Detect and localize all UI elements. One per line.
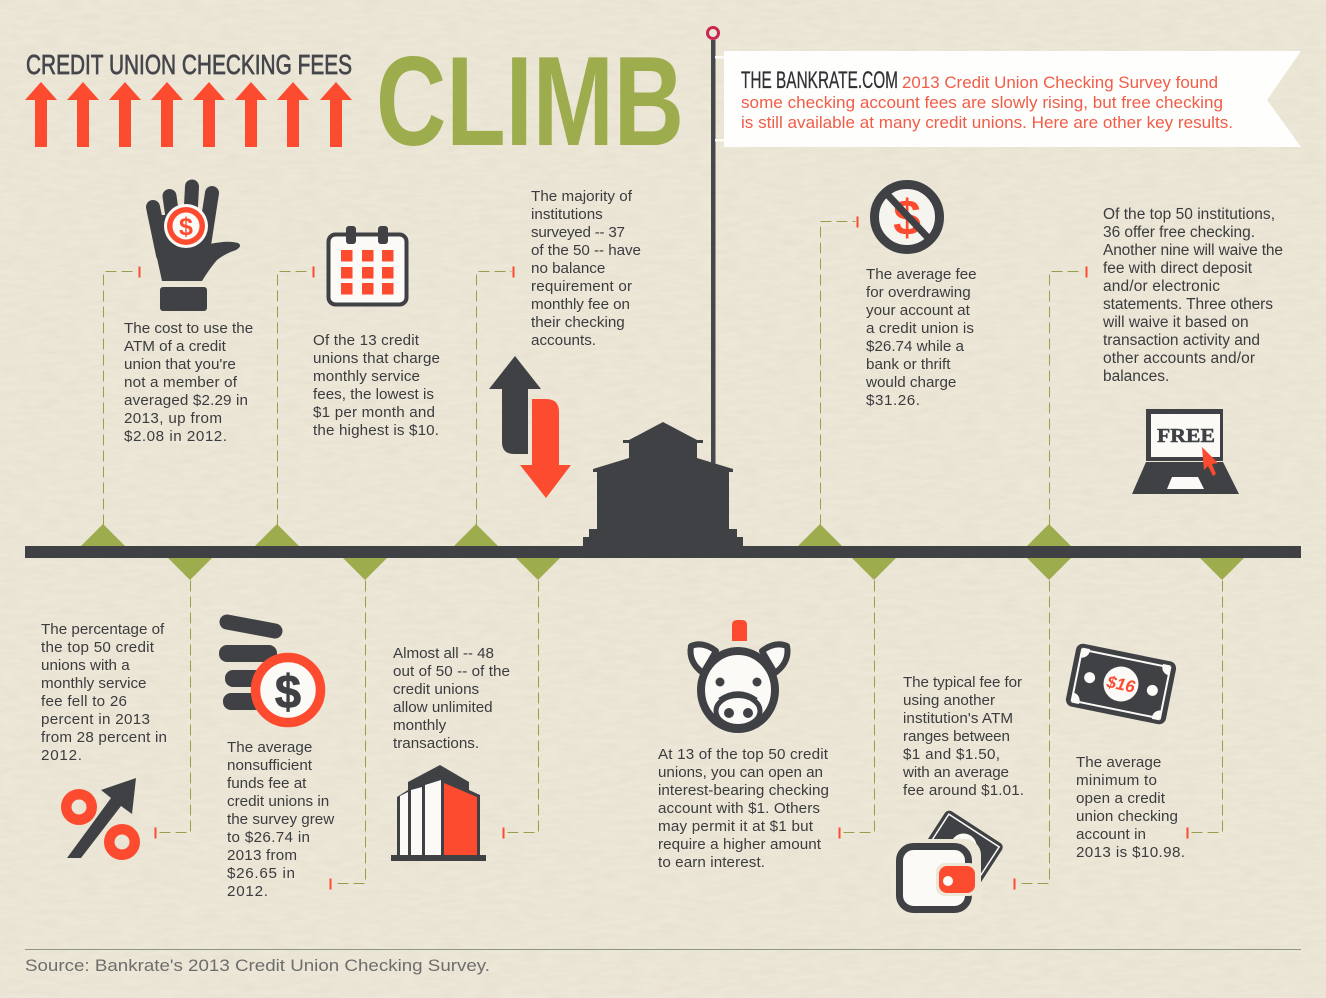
text: ATM cost: ATM of a credit — [124, 338, 227, 355]
text: monthly service fees: fees, the lowest is — [313, 386, 434, 403]
text: unlimited transactions: out of 50 -- of the — [393, 663, 510, 680]
icon: up and down arrows — [489, 356, 571, 498]
text: no balance requirement: of the 50 -- have — [531, 242, 641, 259]
text: ATM cost: averaged $2.29 in — [124, 392, 248, 409]
icon: coins with dollar: $ — [275, 665, 301, 718]
text: interest-bearing checking: At 13 of the top 50 credit — [658, 746, 829, 763]
text: overdraft fee: $31.26. — [866, 392, 920, 409]
text: interest-bearing checking: may permit it at $1 but — [658, 818, 814, 835]
text: percentage with monthly fee: The percentage of — [41, 621, 165, 638]
text: nonsufficient funds fee: 2013 from — [227, 847, 297, 864]
text: percentage with monthly fee: the top 50 credit — [41, 639, 155, 656]
text: overdraft fee: for overdrawing — [866, 284, 971, 301]
text: free checking: statements. Three others — [1103, 296, 1273, 313]
text: monthly service fees: $1 per month and — [313, 404, 435, 421]
source rule — [25, 949, 1301, 950]
text: ATM cost: 2013, up from — [124, 410, 222, 427]
text: ATM cost: The cost to use the — [124, 320, 253, 337]
text: no balance requirement: accounts. — [531, 332, 596, 349]
text: monthly service fees: the highest is $10. — [313, 422, 439, 439]
text: minimum to open: The average — [1076, 754, 1161, 771]
text: percentage with monthly fee: from 28 percent in — [41, 729, 167, 746]
text: unlimited transactions: Almost all -- 48 — [393, 645, 494, 662]
text: nonsufficient funds fee: nonsufficient — [227, 757, 313, 774]
text: unlimited transactions: transactions. — [393, 735, 479, 752]
text: percentage with monthly fee: unions with a — [41, 657, 130, 674]
text: ATM cost: not a member of — [124, 374, 238, 391]
text: percentage with monthly fee: percent in 2013 — [41, 711, 150, 728]
icon: hand with coin — [147, 186, 240, 311]
icon: hand with coin: $ — [179, 213, 193, 241]
title: credit union checking fees: CREDIT UNION CHECKING FEES — [26, 49, 352, 80]
text: interest-bearing checking: account with $1. Others — [658, 800, 820, 817]
text: no balance requirement: surveyed -- 37 — [531, 224, 625, 241]
text: no balance requirement: no balance — [531, 260, 605, 277]
text: no balance requirement: requirement or — [531, 278, 632, 295]
icon: sixteen dollar bill: $16 — [1104, 672, 1137, 697]
flagpole — [708, 28, 725, 470]
text: free checking: and/or electronic — [1103, 278, 1220, 295]
icon: coins with dollar — [219, 622, 320, 722]
text: interest-bearing checking: to earn interest. — [658, 854, 765, 871]
text: interest-bearing checking: require a higher amount — [658, 836, 822, 853]
text: nonsufficient funds fee: credit unions in — [227, 793, 329, 810]
text: percentage with monthly fee: monthly service — [41, 675, 147, 692]
text: no balance requirement: monthly fee on — [531, 296, 630, 313]
icon: laptop free: FREE — [1157, 425, 1215, 447]
text: other institution ATM fee: with an average — [902, 764, 1009, 781]
text: nonsufficient funds fee: funds fee at — [227, 775, 307, 792]
text: overdraft fee: would charge — [865, 374, 956, 391]
text: other institution ATM fee: The typical fee for — [903, 674, 1022, 691]
text: nonsufficient funds fee: 2012. — [227, 883, 268, 900]
text: nonsufficient funds fee: to $26.74 in — [227, 829, 310, 846]
text: free checking: 36 offer free checking. — [1103, 224, 1255, 241]
icon: piggy bank — [690, 620, 788, 729]
text: nonsufficient funds fee: The average — [227, 739, 312, 756]
icon: percent with arrow — [66, 778, 136, 858]
text: minimum to open: minimum to — [1076, 772, 1157, 789]
text: other institution ATM fee: institution's ATM — [903, 710, 1013, 727]
text: other institution ATM fee: ranges between — [903, 728, 1010, 745]
text: minimum to open: union checking — [1076, 808, 1178, 825]
icon: calendar — [328, 226, 406, 304]
text: free checking: other accounts and/or — [1103, 350, 1255, 367]
text: ATM cost: union that you're — [124, 356, 236, 373]
title arrows: eight red up arrows — [25, 82, 352, 147]
text: other institution ATM fee: fee around $1.01. — [903, 782, 1024, 799]
text: minimum to open: open a credit — [1076, 790, 1166, 807]
icon: office building — [391, 765, 486, 861]
text: unlimited transactions: monthly — [393, 717, 447, 734]
text: percentage with monthly fee: 2012. — [41, 747, 82, 764]
icon: no dollar sign: $ — [893, 190, 921, 246]
icon: no dollar sign — [874, 184, 940, 250]
text: no balance requirement: their checking — [531, 314, 625, 331]
banner: intro: THE BANKRATE.COM — [741, 67, 898, 94]
text: minimum to open: 2013 is $10.98. — [1076, 844, 1185, 861]
text: free checking: balances. — [1103, 368, 1169, 385]
text: no balance requirement: The majority of — [531, 188, 633, 205]
text: other institution ATM fee: using another — [903, 692, 995, 709]
text: nonsufficient funds fee: the survey grew — [227, 811, 334, 828]
text: free checking: Of the top 50 institutions, — [1103, 206, 1275, 223]
text: overdraft fee: bank or thrift — [866, 356, 951, 373]
source text: Source: Bankrate's 2013 Credit Union Checking Survey. — [25, 956, 490, 975]
text: free checking: transaction activity and — [1103, 332, 1260, 349]
title: climb: CLIMB — [376, 30, 684, 172]
banner: intro — [724, 51, 1301, 147]
text: ATM cost: $2.08 in 2012. — [124, 428, 227, 445]
icon: bank building — [583, 422, 743, 547]
icon: wallet with bill — [891, 809, 1005, 918]
text: monthly service fees: unions that charge — [313, 350, 440, 367]
icon: laptop free — [1132, 409, 1239, 494]
text: percentage with monthly fee: fee fell to 26 — [41, 693, 127, 710]
text: free checking: fee with direct deposit — [1103, 260, 1253, 277]
text: overdraft fee: a credit union is — [866, 320, 974, 337]
text: overdraft fee: The average fee — [866, 266, 977, 283]
text: free checking: will waive it based on — [1102, 314, 1249, 331]
timeline bar — [25, 546, 1301, 558]
text: interest-bearing checking: unions, you can open an — [658, 764, 823, 781]
timeline connectors — [104, 216, 1222, 890]
text: monthly service fees: monthly service — [313, 368, 420, 385]
text: no balance requirement: institutions — [531, 206, 603, 223]
timeline diamonds — [80, 524, 1245, 580]
text: minimum to open: account in — [1076, 826, 1146, 843]
banner: intro: some checking account fees are slowly rising, but free checking — [741, 93, 1223, 112]
text: interest-bearing checking: interest-bearing checking — [658, 782, 829, 799]
text: overdraft fee: your account at — [866, 302, 971, 319]
text: nonsufficient funds fee: $26.65 in — [227, 865, 295, 882]
text: unlimited transactions: credit unions — [393, 681, 480, 698]
text: unlimited transactions: allow unlimited — [393, 699, 493, 716]
text: monthly service fees: Of the 13 credit — [313, 332, 420, 349]
banner: intro: 2013 Credit Union Checking Survey found — [902, 73, 1218, 92]
banner: intro: is still available at many credit unions. Here are other key results. — [741, 113, 1233, 132]
text: overdraft fee: $26.74 while a — [866, 338, 965, 355]
icon: sixteen dollar bill — [1066, 644, 1176, 724]
text: other institution ATM fee: $1 and $1.50, — [903, 746, 1000, 763]
text: free checking: Another nine will waive the — [1103, 242, 1283, 259]
